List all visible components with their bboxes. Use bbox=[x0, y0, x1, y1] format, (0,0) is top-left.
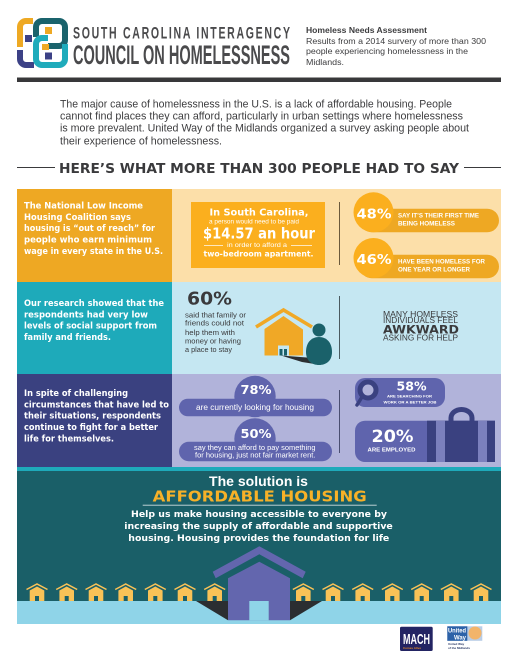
header title bbox=[73, 23, 290, 70]
wage card: In South Carolina, bbox=[210, 208, 308, 218]
row 2 text: respondents had very low bbox=[24, 310, 148, 320]
stat 20% with briefcase bbox=[355, 410, 495, 462]
stat 60%: help them with bbox=[185, 330, 235, 337]
panel: row 1 out of reach bbox=[17, 189, 501, 282]
stat 58% with magnifier: WORK OR A BETTER JOB bbox=[384, 401, 437, 405]
awkward word stack: MANY HOMELESS bbox=[383, 309, 458, 319]
header description: people experiencing homelessness in the bbox=[306, 47, 468, 56]
panel: the solution bbox=[17, 467, 501, 624]
logo: United Way bbox=[447, 626, 482, 650]
stat 46%: HAVE BEEN HOMELESS FOR bbox=[398, 260, 486, 266]
awkward word stack: ASKING FOR HELP bbox=[383, 332, 458, 342]
stat 60%: a place to stay bbox=[185, 347, 233, 354]
row of small houses bbox=[26, 584, 492, 601]
stat 58% with magnifier: 58% bbox=[396, 379, 427, 394]
awkward word stack bbox=[383, 309, 459, 342]
row 2 text: Our research showed that the bbox=[24, 299, 164, 309]
logo: United Way: Way bbox=[454, 635, 467, 641]
stat 50%: for housing, just not fair market rent. bbox=[195, 453, 316, 460]
row 1 text: The National Low Income bbox=[24, 202, 143, 212]
header description: Results from a 2014 survery of more than 300 bbox=[306, 37, 487, 46]
stat 48% bbox=[354, 192, 499, 232]
solution text: housing. Housing provides the foundation for life bbox=[128, 534, 389, 544]
row 1 text: Housing Coalition says bbox=[24, 213, 131, 223]
wage card: two-bedroom apartment. bbox=[204, 250, 314, 258]
header description: Homeless Needs Assessment bbox=[306, 26, 427, 35]
row 3 text: their situations, respondents bbox=[24, 412, 161, 422]
row 1 text bbox=[24, 202, 163, 257]
awkward word stack: AWKWARD bbox=[383, 322, 459, 336]
stat 20% with briefcase: 20% bbox=[372, 427, 414, 447]
row 1 text: housing is “out of reach” for bbox=[24, 224, 156, 234]
intro text: cannot find places they can afford, particularly in urban settings where homelessness bbox=[60, 110, 464, 122]
intro text: The major cause of homelessness in the U.S. is a lack of affordable housing. People bbox=[60, 99, 452, 111]
solution heading: The solution is bbox=[209, 474, 308, 489]
section heading: HERE’S WHAT MORE THAN 300 PEOPLE HAD TO SAY bbox=[59, 161, 459, 177]
logo: MACH bbox=[400, 627, 433, 651]
logo: United Way: United bbox=[448, 628, 466, 634]
logo: United Way: of the Midlands bbox=[448, 646, 470, 650]
intro text: is more prevalent. United Way of the Midlands organized a survey asking people about bbox=[60, 123, 469, 135]
stat 58% with magnifier bbox=[355, 378, 445, 407]
row 3 text: continue to fight for a better bbox=[24, 423, 159, 433]
logo: MACH: Comes Alive bbox=[403, 646, 421, 650]
icon: house and person bbox=[256, 310, 332, 365]
stat 60%: said that family or bbox=[185, 313, 247, 320]
header title: COUNCIL ON HOMELESSNESS bbox=[73, 40, 290, 70]
stat 50%: say they can afford to pay something bbox=[194, 445, 316, 452]
header description: Midlands. bbox=[306, 58, 344, 67]
row 1 text: people who earn minimum bbox=[24, 236, 152, 246]
wage card: $14.57 an hour bbox=[203, 224, 316, 242]
row 3 text: circumstances that have led to bbox=[24, 400, 169, 410]
awkward word stack: INDIVIDUALS FEEL bbox=[383, 315, 458, 325]
stat 78% bbox=[179, 376, 332, 417]
panel: row 3 fighting for better life bbox=[17, 374, 501, 467]
stat 48%: 48% bbox=[356, 207, 392, 222]
stat 46%: ONE YEAR OR LONGER bbox=[398, 268, 471, 274]
intro text bbox=[60, 99, 469, 148]
wage card: a person would need to be paid bbox=[209, 218, 299, 226]
row 1 text: wage in every state in the U.S. bbox=[24, 247, 163, 257]
stat 48%: BEING HOMELESS bbox=[398, 222, 455, 228]
stat 50% bbox=[179, 418, 332, 461]
solution text: Help us make housing accessible to everyone by bbox=[131, 510, 387, 520]
stat 58% with magnifier: ARE SEARCHING FOR bbox=[387, 394, 432, 398]
solution heading bbox=[143, 474, 377, 506]
stat 20% with briefcase: ARE EMPLOYED bbox=[368, 448, 416, 454]
row 2 text: levels of social support from bbox=[24, 322, 157, 332]
row 3 text bbox=[24, 389, 169, 444]
stat 60%: friends could not bbox=[185, 321, 244, 328]
wage card: in order to afford a bbox=[227, 242, 288, 249]
logo: United Way: United Way bbox=[448, 642, 465, 646]
stat 78%: are currently looking for housing bbox=[196, 403, 314, 412]
solution heading: AFFORDABLE HOUSING bbox=[153, 488, 367, 506]
header description bbox=[306, 26, 487, 67]
solution text bbox=[124, 510, 393, 544]
stat 78%: 78% bbox=[240, 382, 272, 397]
stat 46% bbox=[354, 238, 499, 278]
row 3 text: life for themselves. bbox=[24, 434, 114, 444]
intro text: their experience of homelessness. bbox=[60, 136, 222, 148]
wage card bbox=[191, 202, 325, 268]
logo bbox=[20, 21, 65, 65]
row 2 text bbox=[24, 299, 164, 343]
icon: large house bbox=[196, 546, 322, 620]
panel: row 2 social support bbox=[17, 282, 501, 374]
header title: SOUTH CAROLINA INTERAGENCY bbox=[73, 23, 290, 42]
logo: MACH: MACH bbox=[403, 631, 430, 648]
solution text: increasing the supply of affordable and supportive bbox=[124, 522, 393, 532]
row 2 text: family and friends. bbox=[24, 333, 111, 343]
stat 60% bbox=[185, 289, 247, 354]
stat 60%: money or having bbox=[185, 339, 241, 346]
stat 60%: 60% bbox=[187, 289, 232, 310]
stat 50%: 50% bbox=[240, 426, 272, 441]
row 3 text: In spite of challenging bbox=[24, 389, 128, 399]
stat 48%: SAY IT’S THEIR FIRST TIME bbox=[398, 214, 479, 220]
stat 46%: 46% bbox=[356, 253, 392, 268]
